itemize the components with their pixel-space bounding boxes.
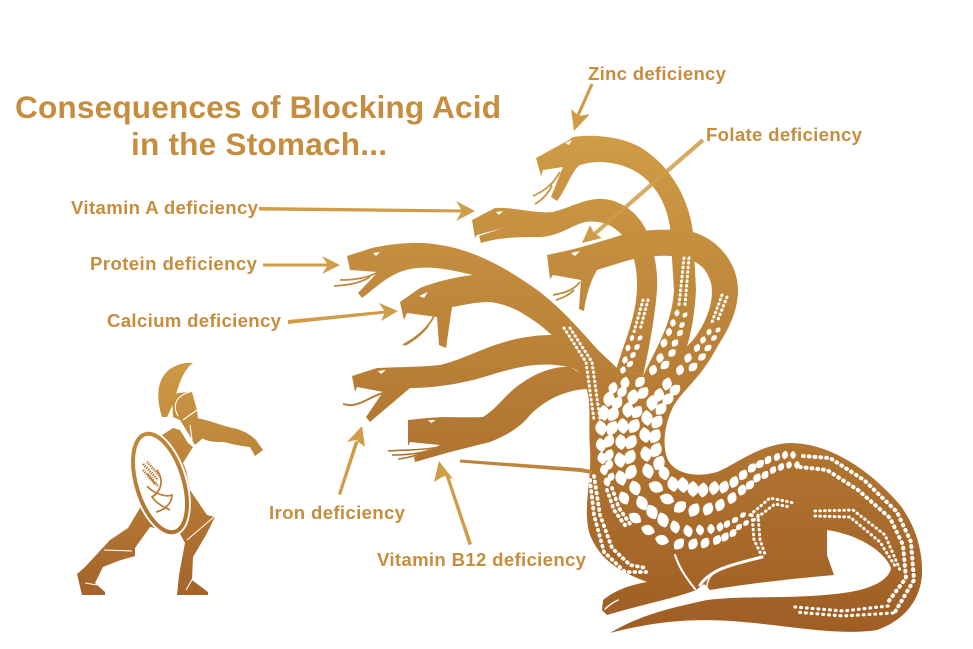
hydra head: vitamin B12	[388, 367, 600, 462]
leg outline gaps	[675, 555, 695, 589]
arrow: zinc	[571, 84, 594, 131]
hydra wheat leaf scales	[594, 309, 800, 552]
label: zinc: Zinc deficiency	[588, 63, 727, 84]
hydra head: vitamin A	[472, 199, 657, 376]
title: Consequences of Blocking Acid	[15, 89, 501, 125]
label: vitamin B12: Vitamin B12 deficiency	[377, 549, 587, 570]
leaves: neck 3 lower	[675, 326, 722, 376]
warrior armor highlights	[85, 392, 215, 590]
label: vitamin A: Vitamin A deficiency	[71, 197, 259, 218]
leaves: central braid upper	[594, 374, 683, 488]
arrow: calcium	[288, 303, 398, 324]
small scales: chest	[590, 476, 646, 572]
arrow: vitamin A	[259, 201, 475, 221]
hydra head: zinc	[533, 136, 696, 385]
label: calcium: Calcium deficiency	[107, 310, 282, 331]
hydra illustration	[334, 136, 922, 633]
hydra head: iron	[343, 335, 620, 422]
hydra small scale rows	[564, 258, 914, 616]
hydra eyes	[373, 140, 580, 423]
label: iron: Iron deficiency	[269, 502, 406, 523]
small scales: neck tips	[564, 258, 727, 420]
hydra head: protein	[334, 243, 617, 385]
shield emblem: wheat and DNA	[143, 462, 172, 512]
deficiency labels	[71, 63, 863, 570]
leaves: neck 2 lower	[619, 334, 644, 375]
warrior shield	[118, 422, 202, 544]
hydra head: calcium	[400, 275, 552, 348]
leaves: neck 1 lower	[648, 309, 689, 376]
hydra body and tail	[585, 346, 922, 633]
arrow: vitamin B12	[434, 461, 472, 545]
label: folate: Folate deficiency	[706, 124, 863, 145]
title: in the Stomach...	[131, 126, 387, 162]
small scales: back and tail	[795, 456, 914, 616]
arrows	[259, 84, 704, 545]
arrow: folate	[582, 138, 704, 243]
pointer line to body	[460, 460, 592, 474]
arrow: protein	[263, 256, 340, 274]
leaves: central braid lower	[616, 450, 800, 552]
title	[15, 89, 501, 162]
small scales: legs	[750, 498, 900, 570]
arrow: iron	[338, 426, 365, 495]
warrior	[77, 363, 263, 595]
hydra head: folate target	[547, 230, 738, 407]
label: protein: Protein deficiency	[90, 253, 258, 274]
warrior body	[77, 363, 263, 595]
